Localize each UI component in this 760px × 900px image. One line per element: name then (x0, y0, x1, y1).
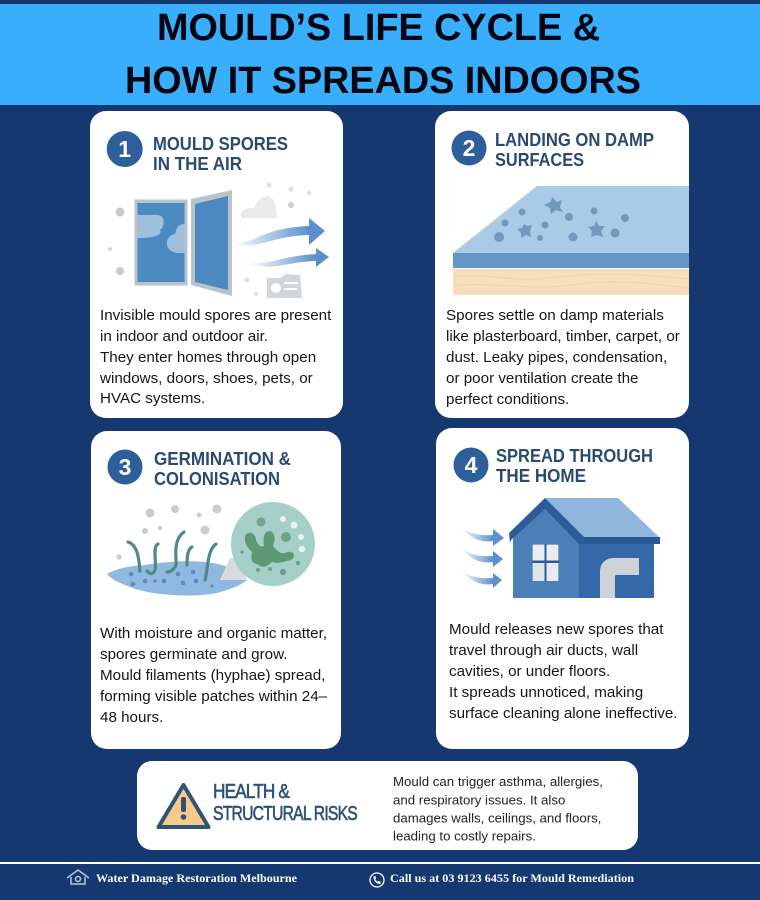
icon: house with duct and air arrows (461, 498, 660, 598)
text block: step 1: Invisible mould spores are present (100, 307, 332, 324)
panel: step 3 germination and colonisation (91, 431, 341, 749)
heading: landing on damp surfaces: LANDING ON DAMP (495, 130, 654, 150)
icon: warning triangle (158, 785, 208, 827)
icon: open window with airflow (108, 182, 329, 298)
step number 1 (107, 131, 143, 167)
heading: germination and colonisation: GERMINATION & (154, 449, 291, 469)
title banner: MOULD’S LIFE CYCLE & (157, 7, 600, 49)
heading: health and structural risks (213, 781, 358, 825)
text block: risks: and respiratory issues. It also (393, 792, 565, 808)
text block: risks: damages walls, ceilings, and floors, (393, 810, 601, 826)
text block: step 4: cavities, or under floors. (449, 663, 610, 680)
text block: step 2: like plasterboard, timber, carpet, or (446, 328, 680, 345)
illustration: hyphae on damp patch with magnified mould (107, 502, 315, 596)
title banner (0, 4, 760, 105)
text block: step 4: travel through air ducts, wall (449, 642, 638, 659)
heading: mould spores in the air: MOULD SPORES (153, 134, 288, 154)
text block: step 1 (99, 307, 332, 407)
text block: step 1: windows, doors, shoes, pets, or (99, 370, 313, 387)
text block: step 3: Mould filaments (hyphae) spread, (100, 667, 325, 684)
panel: step 4 spread through the home (436, 428, 689, 749)
text block: step 4: It spreads unnoticed, making (449, 684, 643, 701)
text block: step 3: forming visible patches within 24– (100, 688, 328, 705)
heading: spread through the home: THE HOME (496, 466, 586, 486)
icon: phone (370, 873, 384, 887)
step number 2: 2 (463, 135, 475, 161)
text block: step 4: surface cleaning alone ineffective. (449, 705, 678, 722)
heading: germination and colonisation (154, 449, 291, 489)
panel: health and structural risks (137, 761, 638, 850)
text block: step 3: With moisture and organic matter, (100, 625, 327, 642)
title banner: HOW IT SPREADS INDOORS (125, 60, 641, 102)
heading: spread through the home (496, 446, 653, 486)
heading: landing on damp surfaces: SURFACES (495, 150, 584, 170)
step number 2 (452, 130, 486, 166)
text block: step 2: perfect conditions. (446, 391, 569, 408)
text block: step 1: HVAC systems. (100, 390, 205, 407)
text block: risks: Mould can trigger asthma, allergies, (393, 774, 603, 789)
icon: house (67, 870, 89, 884)
heading: spread through the home: SPREAD THROUGH (496, 446, 653, 466)
text block: step 1: in indoor and outdoor air. (100, 328, 268, 345)
step number 3 (108, 450, 142, 484)
illustration: spores on damp surface (453, 186, 689, 295)
text block: step 3: 48 hours. (100, 709, 163, 726)
text block: step 2: dust. Leaky pipes, condensation, (446, 349, 667, 366)
heading: mould spores in the air (153, 134, 288, 174)
text block: step 4: Mould releases new spores that (449, 621, 664, 638)
heading: landing on damp surfaces (495, 130, 654, 170)
step number 4 (454, 448, 488, 482)
footer: phone call to action: Call us at 03 9123 6455 for Mould Remediation (390, 871, 634, 885)
text block: step 2: Spores settle on damp materials (446, 307, 664, 324)
text block: step 2 (446, 307, 680, 408)
step number 4: 4 (465, 452, 478, 478)
heading: health and structural risks: STRUCTURAL RISKS (213, 803, 358, 825)
text block: step 3 (100, 625, 328, 726)
text block: step 3: spores germinate and grow. (100, 646, 287, 663)
text block: step 2: or poor ventilation create the (446, 370, 638, 387)
text block: step 4 (449, 621, 678, 722)
text block: risks: leading to costly repairs. (393, 828, 536, 844)
heading: germination and colonisation: COLONISATION (154, 469, 280, 489)
panel: step 2 landing on damp surfaces (435, 111, 689, 418)
step number 3: 3 (119, 454, 131, 480)
heading: mould spores in the air: IN THE AIR (153, 154, 242, 174)
text block: risks (393, 774, 603, 844)
step number 1: 1 (118, 136, 131, 162)
footer: company: Water Damage Restoration Melbourne (96, 871, 298, 885)
heading: health and structural risks: HEALTH & (213, 781, 290, 803)
text block: step 1: They enter homes through open (100, 349, 316, 366)
panel: step 1 mould spores in the air (90, 111, 343, 418)
